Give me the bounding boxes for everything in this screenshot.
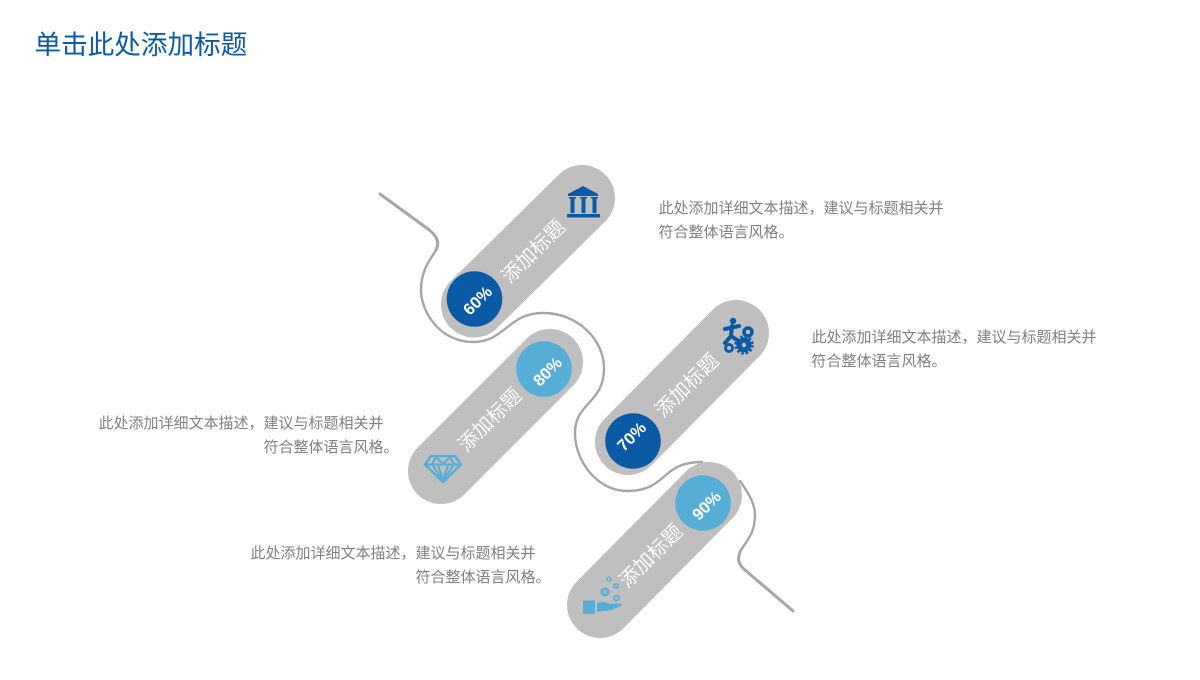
icon: bank: [567, 186, 600, 218]
pill: 60%: 60%: [460, 283, 496, 319]
text block: 90% description: [250, 544, 551, 586]
pill: 70%: [605, 318, 752, 469]
pill: 90%: [583, 475, 731, 614]
text block: 80% description: [98, 414, 399, 456]
pill: 70%: 70%: [614, 419, 650, 455]
pill: 90%: 90%: [689, 488, 725, 524]
icon: diamond: [425, 456, 461, 482]
text block: 90% description: 符合整体语言风格。: [416, 568, 551, 586]
icon: hand with coins: [583, 577, 622, 614]
pill: 80%: [425, 341, 572, 482]
connecting curve: [380, 194, 793, 611]
text block: 70% description: [812, 328, 1097, 370]
text block: 60% description: 符合整体语言风格。: [658, 224, 794, 240]
text block: 60% description: 此处添加详细文本描述，建议与标题相关并: [658, 200, 944, 216]
pill: 80%: 添加标题: [454, 384, 527, 457]
pill: 90%: 添加标题: [615, 520, 688, 593]
text block: 60% description: [658, 200, 944, 240]
pill: 70%: 添加标题: [651, 349, 724, 422]
text block: 70% description: 符合整体语言风格。: [812, 352, 947, 370]
text block: 80% description: 此处添加详细文本描述，建议与标题相关并: [98, 414, 384, 432]
pill: 60%: [447, 186, 600, 327]
title: 单击此处添加标题: [34, 30, 247, 60]
icon: person and gears: [725, 318, 752, 354]
pill: 60%: 添加标题: [497, 215, 570, 288]
text block: 90% description: 此处添加详细文本描述，建议与标题相关并: [250, 544, 536, 562]
text block: 70% description: 此处添加详细文本描述，建议与标题相关并: [812, 328, 1097, 346]
text block: 80% description: 符合整体语言风格。: [264, 438, 399, 456]
pill: 80%: 80%: [530, 354, 566, 390]
